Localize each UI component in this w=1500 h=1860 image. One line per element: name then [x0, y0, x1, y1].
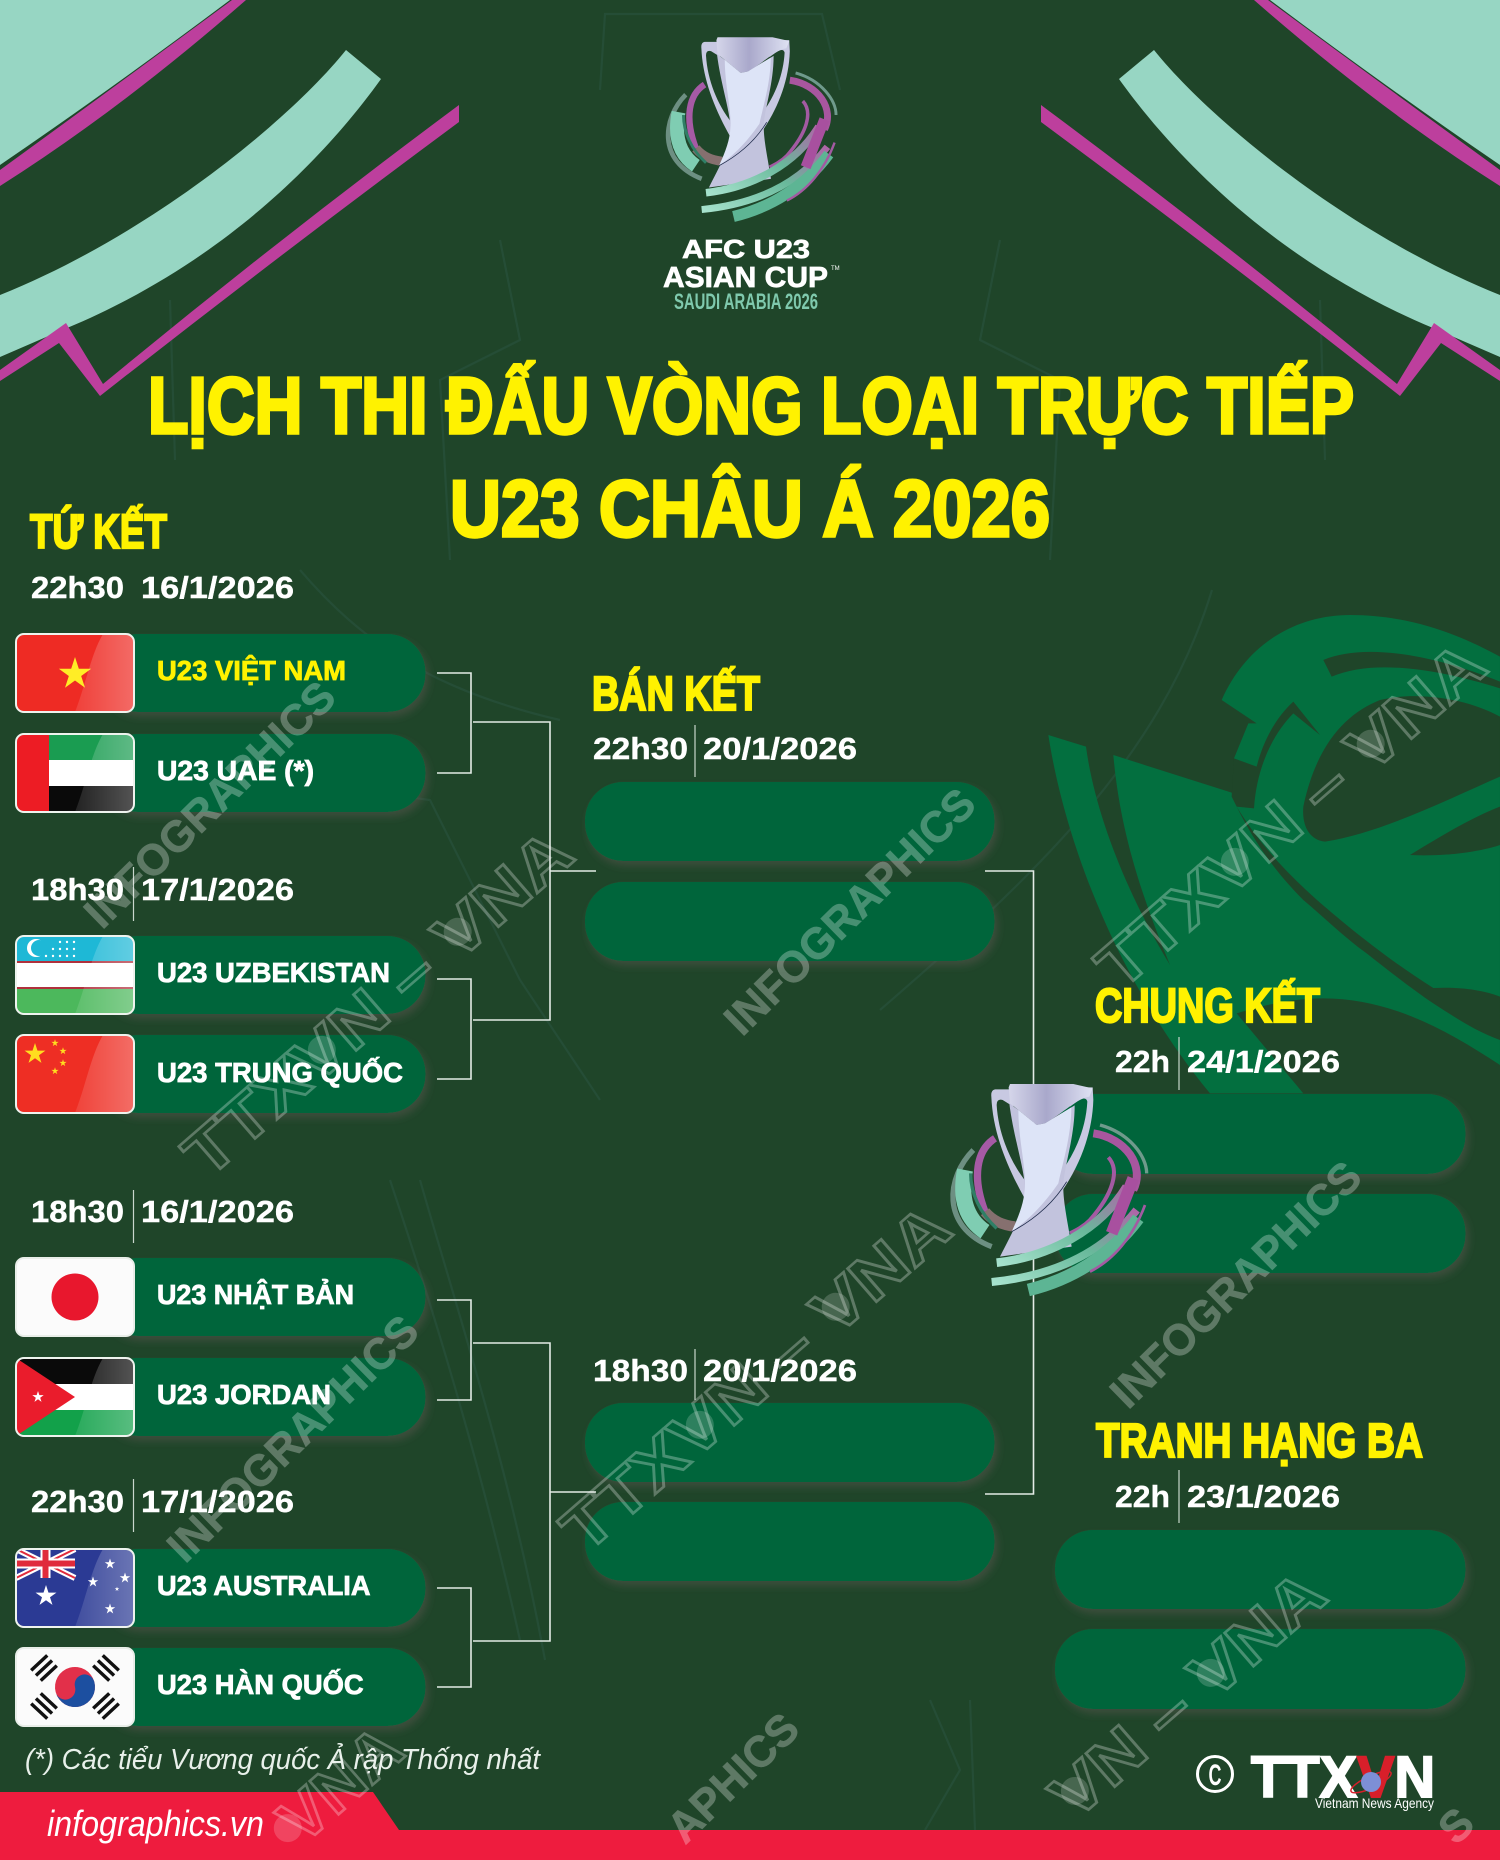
team: Uzbekistan: U23 UZBEKISTAN [157, 957, 390, 988]
background pattern [170, 14, 1325, 1830]
watermarks: S [1429, 1798, 1484, 1854]
date: match 3: 18h30 [31, 1194, 124, 1229]
heading: final: CHUNG KẾT [1095, 979, 1320, 1033]
final slot 1 [1055, 1094, 1466, 1174]
team: Australia [100, 1549, 426, 1627]
date: semi final 2: 20/1/2026 [703, 1353, 857, 1388]
date: match 3: 16/1/2026 [141, 1194, 294, 1229]
flag: Uzbekistan [16, 936, 134, 1014]
third place slot 2 [1055, 1629, 1466, 1709]
copyright mark [1198, 1756, 1232, 1792]
semi final slot 3 [585, 1403, 994, 1482]
trophy [953, 1084, 1147, 1290]
heading: quarter finals: TỨ KẾT [30, 504, 167, 559]
date: match 2: 17/1/2026 [141, 872, 294, 907]
watermarks: VN – VNA [1036, 1556, 1339, 1833]
semi final slot 1 [585, 782, 994, 861]
final slot 2 [1055, 1194, 1466, 1273]
AFC U23 Asian Cup logo: AFC U23 [682, 234, 810, 264]
third place slot 1 [1055, 1530, 1466, 1609]
watermarks: INFOGRAPHICS [715, 779, 985, 1045]
watermarks: TTXVN – VNA [1082, 627, 1499, 1003]
date: third place [1115, 1470, 1340, 1523]
semi final slot 4 [585, 1502, 994, 1581]
flag: UAE [16, 734, 134, 812]
heading: semi finals: BÁN KẾT [592, 667, 760, 721]
date: final: 24/1/2026 [1187, 1044, 1340, 1079]
date: match 2 [31, 867, 294, 921]
TTXVN logo: Vietnam News Agency [1315, 1795, 1434, 1811]
watermarks: INFOGRAPHICS [75, 672, 345, 938]
watermarks: INFOGRAPHICS [1101, 1152, 1371, 1418]
date: match 2: 18h30 [31, 872, 124, 907]
date: semi final 2: 18h30 [593, 1353, 688, 1388]
footer site name: infographics.vn [47, 1803, 264, 1844]
date: match 3 [31, 1190, 294, 1243]
team: China [100, 1035, 426, 1113]
top left corner ornament [0, 0, 459, 396]
top right corner ornament [1041, 0, 1500, 396]
flag: China [16, 1035, 134, 1113]
team: Vietnam: U23 VIỆT NAM [157, 655, 346, 686]
team: Australia: U23 AUSTRALIA [157, 1570, 370, 1601]
watermarks: INFOGRAPHICS [158, 1306, 428, 1572]
footnote: (*) Các tiểu Vương quốc Ả rập Thống nhất [25, 1742, 542, 1776]
date: match 4 [31, 1479, 294, 1532]
team: South Korea [100, 1648, 426, 1726]
flag: Japan [16, 1258, 134, 1336]
AFC U23 Asian Cup logo: ASIAN CUP [663, 262, 828, 294]
TTXVN logo: TTXVN [1251, 1745, 1435, 1810]
team: Vietnam [100, 634, 426, 712]
AFC U23 Asian Cup logo: TM [831, 266, 840, 272]
date: semi final 1: 22h30 [593, 731, 688, 766]
team: China: U23 TRUNG QUỐC [157, 1056, 403, 1088]
date: third place: 22h [1115, 1479, 1170, 1514]
flag: Jordan [16, 1358, 134, 1436]
watermarks: APHICS [658, 1704, 809, 1853]
team: UAE [100, 734, 426, 812]
background emblem [1048, 615, 1500, 1093]
flag: South Korea [16, 1648, 134, 1726]
AFC U23 Asian Cup logo [663, 37, 840, 314]
copyright mark: C [1208, 1759, 1222, 1792]
date: match 4: 17/1/2026 [141, 1484, 294, 1519]
date: match 1: 22h30 [31, 570, 124, 605]
date: match 4: 22h30 [31, 1484, 124, 1519]
date: final: 22h [1115, 1044, 1170, 1079]
title [148, 361, 1354, 553]
heading: third place: TRANH HẠNG BA [1096, 1415, 1423, 1468]
flag: Vietnam [16, 634, 134, 712]
watermarks [75, 627, 1499, 1860]
watermarks: VNA [264, 1711, 416, 1857]
footer bar [0, 1792, 1500, 1860]
date: final [1115, 1037, 1340, 1090]
watermarks: TTXVN – VNA [547, 1190, 964, 1566]
AFC U23 Asian Cup logo: SAUDI ARABIA 2026 [674, 289, 818, 314]
date: match 1 [31, 570, 294, 605]
watermarks: TTXVN – VNA [169, 815, 586, 1191]
team: South Korea: U23 HÀN QUỐC [157, 1668, 364, 1700]
semi final slot 2 [585, 882, 994, 961]
date: semi final 1: 20/1/2026 [703, 731, 857, 766]
team: Uzbekistan [100, 936, 426, 1014]
date: semi final 2 [593, 1349, 857, 1400]
date: match 1: 16/1/2026 [141, 570, 294, 605]
flag: Australia [16, 1549, 134, 1627]
title: U23 CHÂU Á 2026 [450, 464, 1050, 553]
team: UAE: U23 UAE (*) [157, 755, 314, 786]
date: third place: 23/1/2026 [1187, 1479, 1340, 1514]
team: Jordan: U23 JORDAN [157, 1379, 331, 1410]
date: semi final 1 [593, 725, 857, 777]
team: Jordan [100, 1358, 426, 1436]
bracket connectors [437, 673, 1034, 1687]
team: Japan: U23 NHẬT BẢN [157, 1278, 354, 1310]
team: Japan [100, 1258, 426, 1336]
